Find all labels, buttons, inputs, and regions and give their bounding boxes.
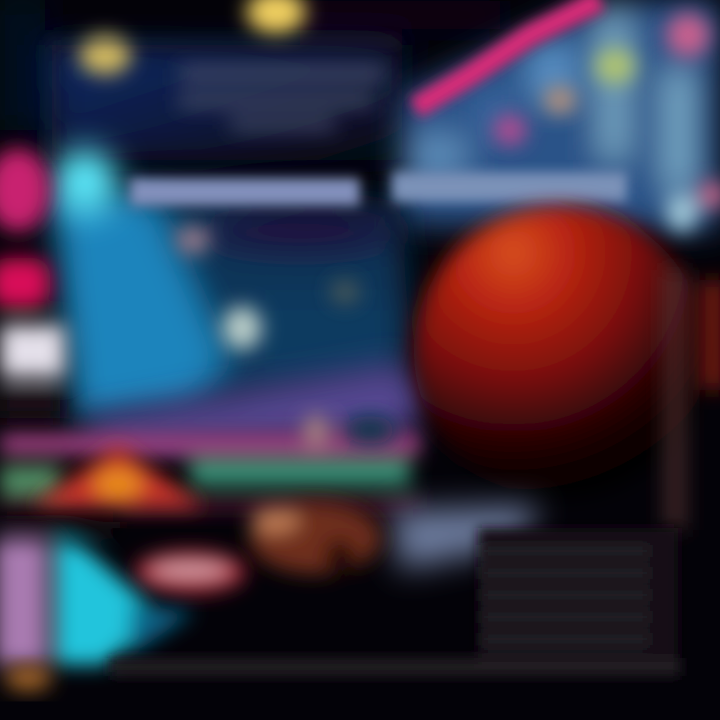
icon: brown orange creature <box>249 502 381 574</box>
panel: blue central region <box>50 185 410 420</box>
panel: lower blue band <box>390 505 540 570</box>
icon: orange triangle <box>30 445 205 508</box>
icon: cyan glow <box>53 148 117 216</box>
panel: frame line <box>50 42 400 160</box>
panel: colourful stripes <box>0 434 420 511</box>
panel: red sphere <box>414 206 706 498</box>
heading: main title <box>130 172 627 206</box>
marker: small figure <box>304 414 395 450</box>
icon: orange corner glow <box>4 665 52 691</box>
panel: left stacked tabs <box>0 148 65 418</box>
panel: top right chart grid <box>400 0 720 230</box>
markers: chart dots <box>494 13 720 232</box>
panel: purple diagonal band <box>80 362 430 445</box>
panel: bottom left colour blocks <box>0 518 195 665</box>
heading: blurred subtitle lines <box>178 66 385 130</box>
panel: sphere side bars <box>664 270 720 530</box>
markers: small lights <box>176 226 360 350</box>
panel: bottom right dark table <box>110 528 680 676</box>
chart line: pink trend <box>415 0 600 108</box>
panel: header backdrop <box>0 0 500 160</box>
icon: yellow lights <box>79 0 306 75</box>
panel: red white banner <box>134 550 246 594</box>
